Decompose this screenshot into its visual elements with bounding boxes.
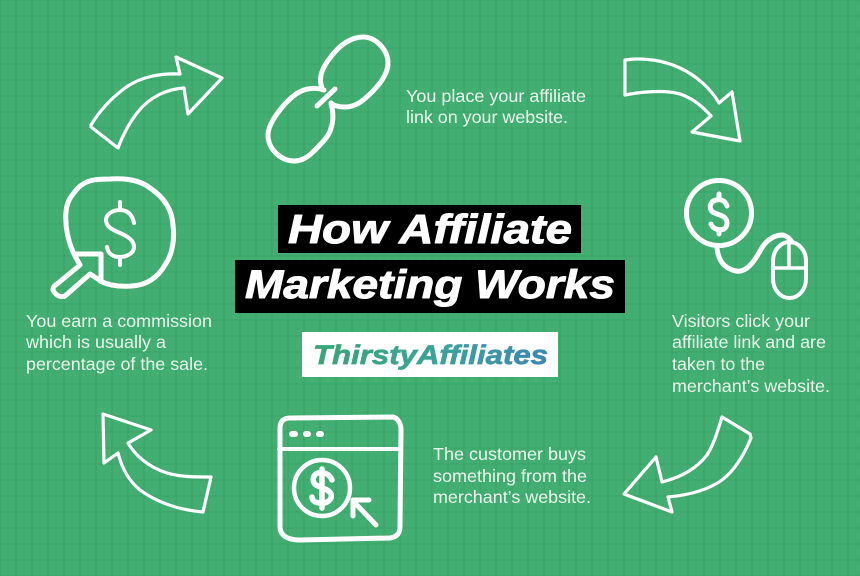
arrow: bottom left: [103, 414, 211, 512]
step 2 text: Visitors click your: [672, 311, 810, 331]
step 4 text: You earn a commission: [26, 311, 212, 331]
step 3 text: merchant’s website.: [433, 487, 591, 507]
icon: mouse with dollar coin: [686, 180, 806, 298]
title line 1: How Affiliate: [288, 206, 572, 252]
step 3 text: something from the: [433, 466, 587, 486]
icon: dollar sign: [106, 202, 134, 265]
step 4 text: [25, 311, 212, 374]
icon: browser window with dollar: [279, 417, 401, 540]
icon: chain link: [268, 37, 388, 161]
title block: [235, 205, 625, 313]
icon: dollar sign: [312, 469, 332, 508]
step 2 text: [672, 311, 830, 396]
step 3 text: The customer buys: [433, 444, 586, 464]
brand logo: [302, 332, 558, 377]
arrow: bottom right: [624, 417, 751, 512]
arrow: top right: [625, 59, 740, 141]
step 2 text: taken to the: [672, 354, 765, 374]
step 4 text: percentage of the sale.: [26, 354, 208, 374]
icon: dollar sign: [710, 194, 727, 234]
step 2 text: affiliate link and are: [672, 332, 826, 352]
step 2 text: merchant’s website.: [672, 376, 830, 396]
title line 2: [235, 260, 625, 313]
title line 2: Marketing Works: [245, 263, 615, 307]
step 4 text: which is usually a: [25, 332, 166, 352]
icon: dollar coin with arrow: [53, 179, 174, 297]
brand logo: ThirstyAffiliates: [313, 340, 548, 370]
step 3 text: [433, 444, 591, 507]
arrow: top left: [91, 57, 222, 148]
step 1 text: [406, 86, 586, 127]
step 1 text: You place your affiliate: [406, 86, 586, 106]
icon: cursor arrow: [353, 500, 376, 525]
icon: arrow outline: [53, 254, 101, 297]
step 1 text: link on your website.: [406, 107, 568, 127]
